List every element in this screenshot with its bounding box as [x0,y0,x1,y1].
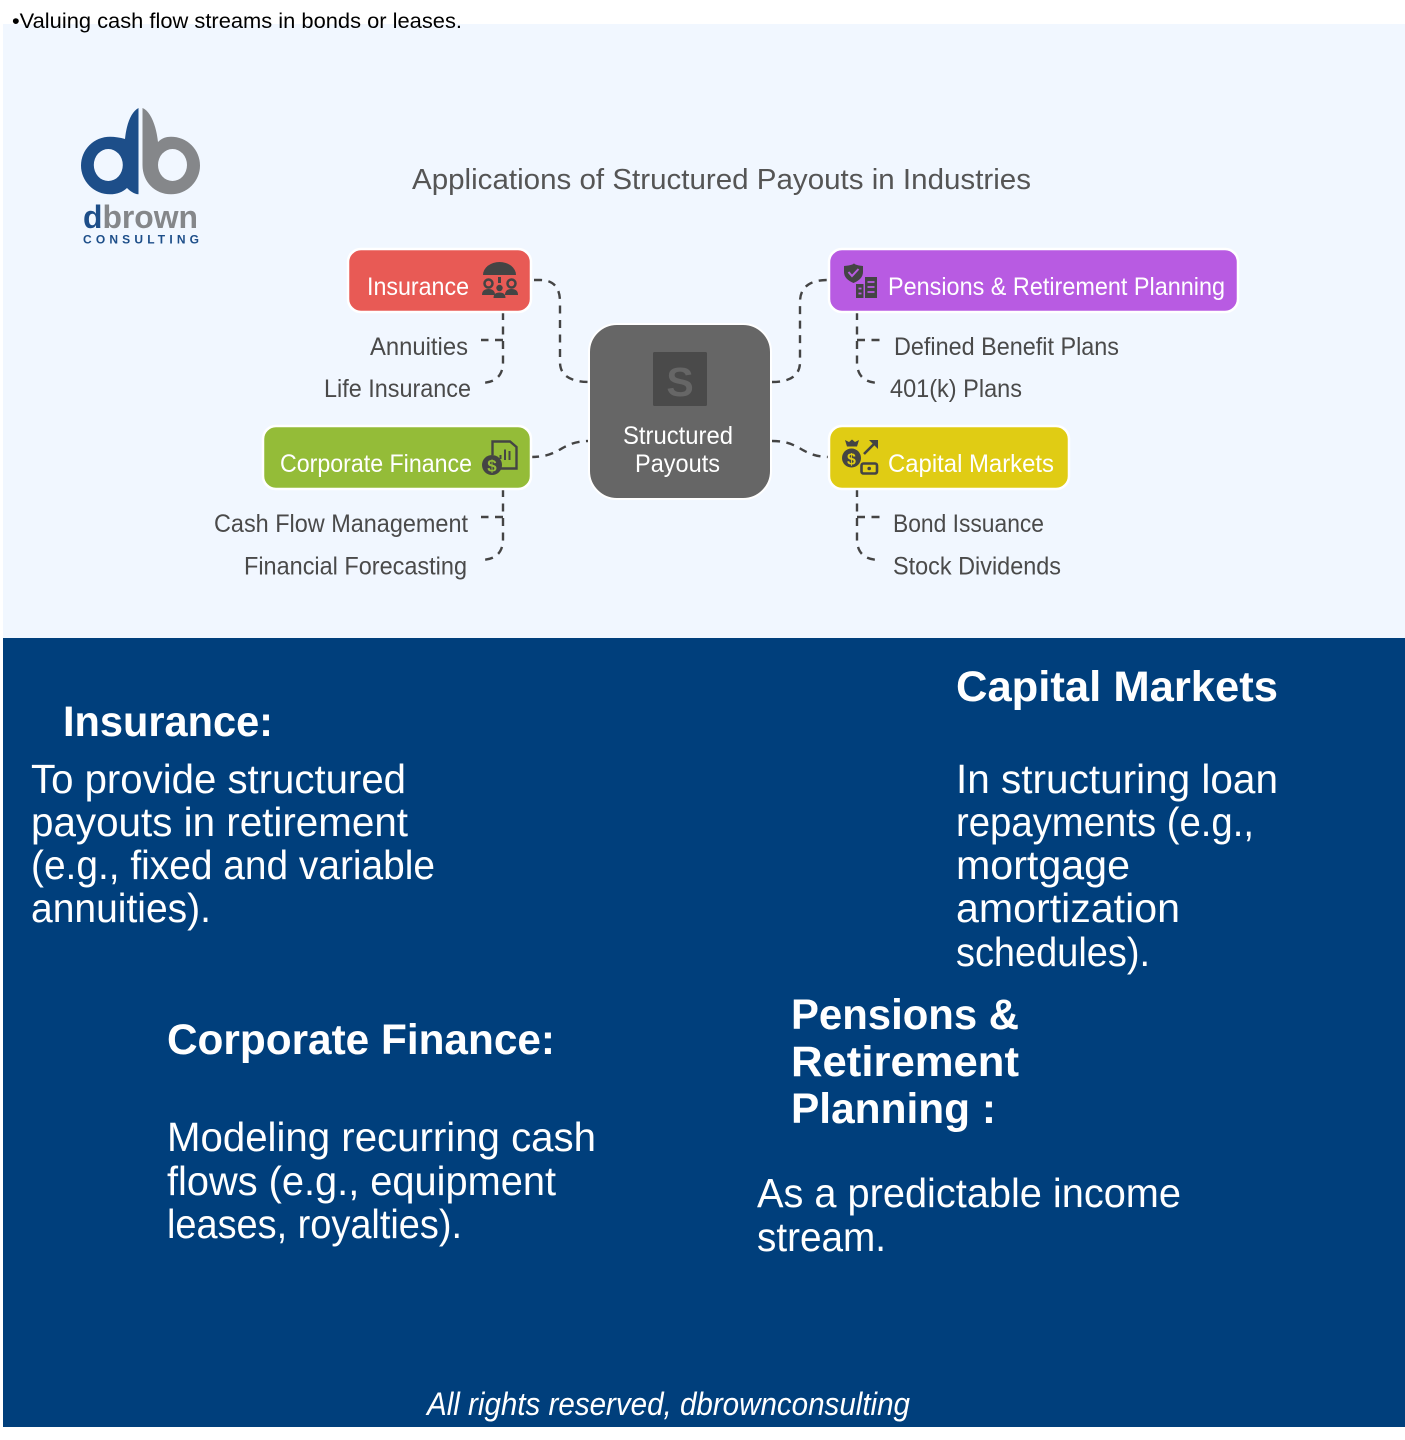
text block: Corporate Finance: Modeling recurring cash [167,1114,596,1160]
title: Applications of Structured Payouts in Industries [412,164,1031,196]
logo: dbrown consulting [81,108,200,246]
node: Capital Markets: Capital Markets [888,450,1054,478]
labels: capital markets branches: Bond Issuance [893,510,1044,538]
text block: Pensions & Retirement Planning: stream. [757,1214,886,1260]
text block: Insurance: Insurance: [63,698,273,746]
labels: insurance branches [324,333,471,403]
node: Structured Payouts: Structured [623,422,733,450]
text block: Capital Markets: amortization [956,885,1180,931]
icon: umbrella over people [482,262,518,298]
text block: Insurance [31,698,435,931]
footer credit: All rights reserved, dbrownconsulting [425,1386,910,1422]
text block: Insurance: payouts in retirement [31,799,409,845]
labels: pensions branches: Defined Benefit Plans [894,333,1119,361]
labels: corporate finance branches: Financial Forecasting [244,552,467,580]
node: Pensions & Retirement Planning [829,249,1238,312]
top caption: •Valuing cash flow streams in bonds or leases. [12,9,462,33]
text block: Pensions & Retirement Planning: Planning : [791,1085,996,1133]
text block: Corporate Finance: leases, royalties). [167,1201,462,1247]
text block: Corporate Finance: Corporate Finance: [167,1016,555,1064]
text block: Insurance: To provide structured [31,756,406,802]
icon: report with dollar coin: $ [487,456,497,476]
text block: Capital Markets: schedules). [956,929,1150,975]
labels: pensions branches: 401(k) Plans [890,375,1022,403]
text block: Capital Markets: mortgage [956,842,1130,888]
labels: capital markets branches [893,510,1061,580]
text block: Capital Markets: In structuring loan [956,756,1278,802]
labels: insurance branches: Annuities [370,333,468,361]
labels: pensions branches [890,333,1119,403]
logo: dbrown consulting: dbrown [83,199,198,235]
node: Corporate Finance: Corporate Finance [280,450,472,478]
text block: Pensions & Retirement Planning [757,991,1181,1260]
node: Capital Markets [829,426,1069,489]
text block: Insurance: annuities). [31,885,211,931]
text block: Pensions & Retirement Planning: As a predictable income [757,1170,1181,1216]
labels: corporate finance branches: Cash Flow Management [214,510,468,538]
icon: S square [653,352,707,406]
icon: shield and buildings [844,263,877,298]
text block: Capital Markets: repayments (e.g., [956,799,1254,845]
node: Insurance [348,249,531,312]
node: Structured Payouts: Payouts [635,450,720,478]
node: Insurance: Insurance [367,273,469,301]
labels: corporate finance branches [214,510,468,580]
text block: Pensions & Retirement Planning: Retirement [791,1038,1019,1086]
node: Structured Payouts [589,324,771,499]
icon: money bag, arrow and banknote: $ [847,452,856,468]
icon: report with dollar coin [482,442,516,476]
connectors [480,280,880,560]
node: Corporate Finance [263,426,531,489]
panel: blue details background [3,638,1405,1427]
text block: Insurance: (e.g., fixed and variable [31,842,435,888]
labels: capital markets branches: Stock Dividends [893,552,1061,580]
logo: dbrown consulting: CONSULTING [83,232,199,246]
icon: money bag, arrow and banknote [842,440,878,474]
node: Pensions & Retirement Planning: Pensions & Retirement Planning [888,273,1225,301]
panel: diagram background [3,24,1405,638]
labels: insurance branches: Life Insurance [324,375,471,403]
text block: Pensions & Retirement Planning: Pensions & [791,991,1019,1039]
text block: Capital Markets: Capital Markets [956,663,1278,711]
text block: Capital Markets [956,663,1278,975]
icon: S square: S [666,359,694,405]
text block: Corporate Finance [167,1016,596,1247]
text block: Corporate Finance: flows (e.g., equipment [167,1158,557,1204]
